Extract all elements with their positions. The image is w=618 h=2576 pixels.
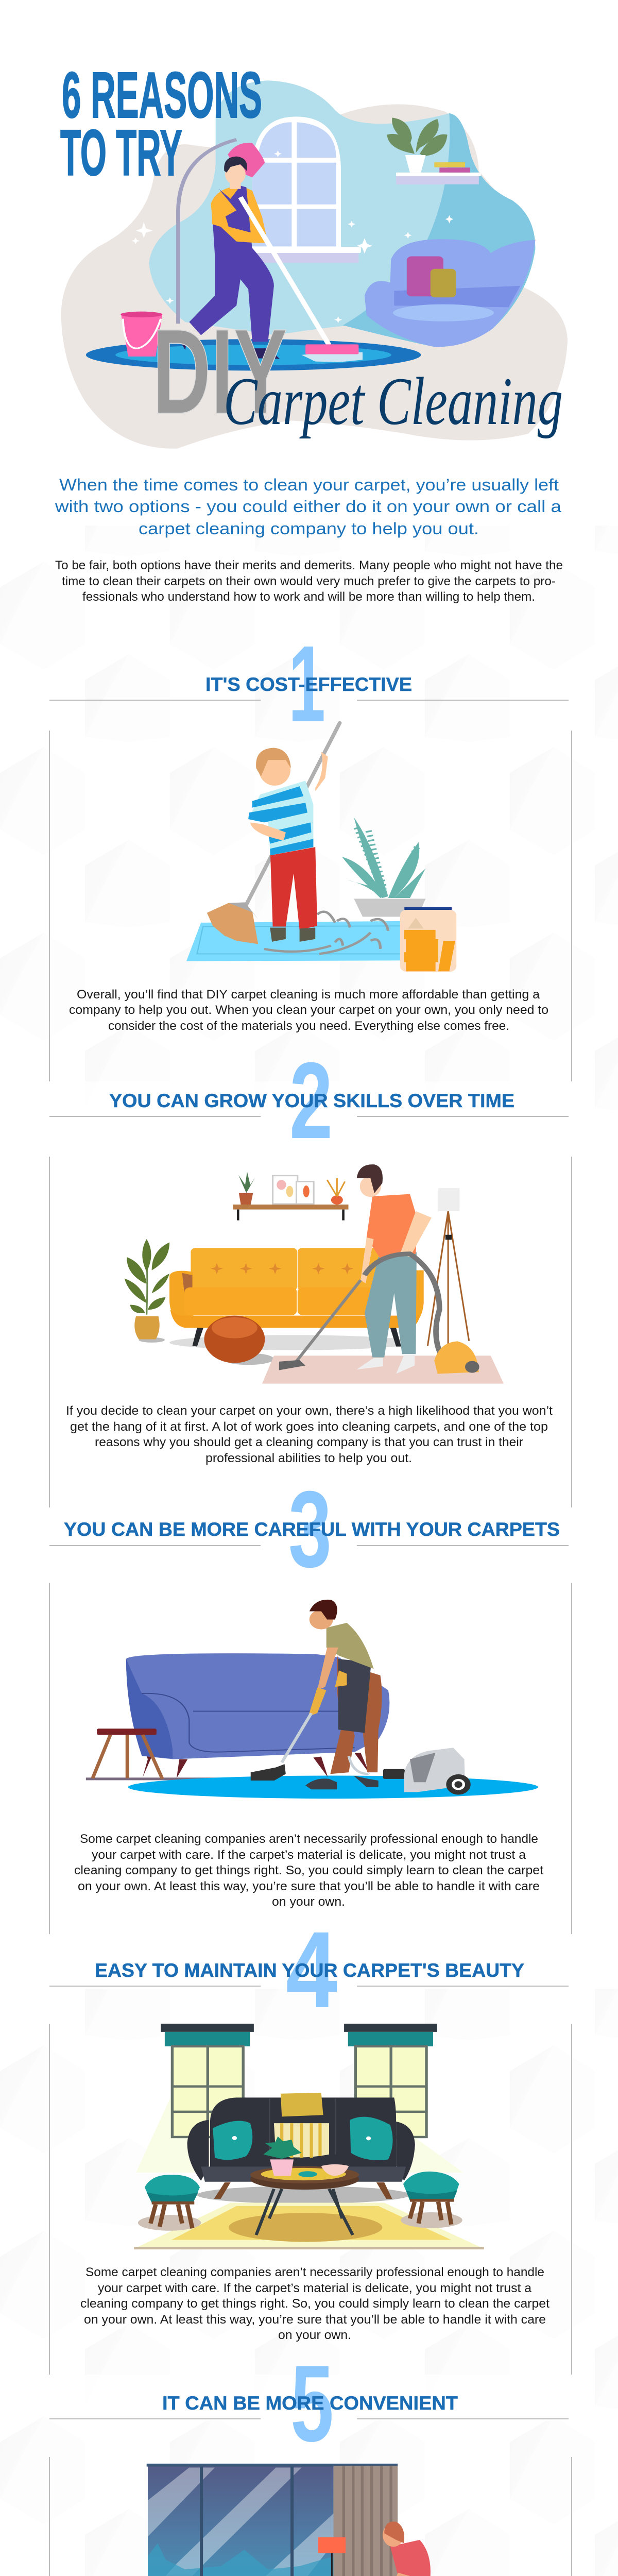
intro text bbox=[55, 476, 561, 538]
text block 1: Overall, you’ll find that DIY carpet cleaning is much more affordable than getting a bbox=[77, 988, 540, 1002]
text block 2: get the hang of it at first. A lot of work goes into cleaning carpets, and one of the top bbox=[70, 1420, 548, 1434]
text block 2 bbox=[66, 1404, 553, 1465]
intro text: carpet cleaning company to help you out. bbox=[139, 519, 479, 538]
illustration: woman vacuuming blue sofa bbox=[86, 1600, 538, 1799]
section 4 heading: 4 bbox=[286, 1909, 337, 2030]
panel 3 frame bbox=[49, 1583, 572, 1934]
illustration: boy sweeping bbox=[186, 723, 456, 972]
text block 3: Some carpet cleaning companies aren’t necessarily professional enough to handle bbox=[80, 1832, 538, 1846]
intro paragraph: fessionals who understand how to work and will be more than willing to help them. bbox=[82, 590, 535, 604]
text block 3: on your own. At least this way, you’re sure that you’ll be able to handle it with care bbox=[78, 1879, 540, 1893]
text block 3 bbox=[74, 1832, 543, 1909]
section 3 heading: YOU CAN BE MORE CAREFUL WITH YOUR CARPETS bbox=[64, 1519, 560, 1540]
illustration: woman vacuuming red rug bbox=[117, 2464, 500, 2576]
title: 6 reasons to try: 6 REASONS bbox=[62, 59, 262, 131]
panel 1 frame bbox=[49, 731, 572, 1081]
section 2 heading: 2 bbox=[289, 1040, 333, 1161]
panel 5 frame bbox=[49, 2457, 572, 2576]
text block 4: on your own. bbox=[278, 2328, 351, 2342]
intro paragraph: To be fair, both options have their merits and demerits. Many people who might not have the bbox=[55, 558, 563, 572]
section 5 heading: IT CAN BE MORE CONVENIENT bbox=[162, 2393, 458, 2414]
section 3 heading: 3 bbox=[288, 1468, 332, 1590]
text block 3: on your own. bbox=[272, 1895, 345, 1909]
section 4 heading bbox=[49, 1909, 572, 2030]
illustration: man vacuuming beside orange sofa bbox=[125, 1164, 504, 1384]
illustration: living room with dark sofa bbox=[134, 2024, 484, 2249]
text block 3: cleaning company to get things right. So, you could simply learn to clean the carpet bbox=[74, 1863, 543, 1877]
panel 2 frame bbox=[49, 1157, 572, 1507]
section 2 heading: YOU CAN GROW YOUR SKILLS OVER TIME bbox=[109, 1090, 514, 1111]
intro text: with two options - you could either do it on your own or call a bbox=[55, 497, 561, 516]
intro paragraph: time to clean their carpets on their own would very much prefer to give the carpets to pro- bbox=[62, 574, 556, 588]
section 1 heading: 1 bbox=[288, 623, 325, 744]
title: DIY: DIY bbox=[152, 303, 287, 439]
text block 4 bbox=[80, 2265, 550, 2342]
text block 1: company to help you out. When you clean your carpet on your own, you only need to bbox=[69, 1003, 548, 1017]
section 4 heading: EASY TO MAINTAIN YOUR CARPET'S BEAUTY bbox=[95, 1960, 524, 1981]
intro paragraph bbox=[55, 558, 563, 604]
text block 4: cleaning company to get things right. So, you could simply learn to clean the carpet bbox=[80, 2297, 550, 2311]
title: 6 reasons to try bbox=[60, 59, 262, 189]
section 1 heading: IT'S COST-EFFECTIVE bbox=[205, 674, 412, 695]
text block 1 bbox=[69, 988, 548, 1033]
intro text: When the time comes to clean your carpet, you’re usually left bbox=[59, 476, 559, 494]
text block 2: reasons why you should get a cleaning company is that you can trust in their bbox=[95, 1435, 523, 1449]
section 2 heading bbox=[49, 1040, 572, 1161]
text block 1: consider the cost of the materials you need. Everything else comes free. bbox=[108, 1019, 509, 1033]
title: 6 reasons to try: TO TRY bbox=[60, 116, 182, 189]
section 5 heading: 5 bbox=[290, 2343, 334, 2464]
panel 4 frame bbox=[49, 2024, 572, 2375]
text block 4: your carpet with care. If the carpet’s material is delicate, you might not trust a bbox=[98, 2281, 531, 2295]
text block 2: If you decide to clean your carpet on your own, there’s a high likelihood that you won’t bbox=[66, 1404, 553, 1418]
text block 4: Some carpet cleaning companies aren’t necessarily professional enough to handle bbox=[85, 2265, 544, 2279]
section 3 heading bbox=[49, 1468, 569, 1590]
text block 4: on your own. At least this way, you’re sure that you’ll be able to handle it with care bbox=[84, 2313, 546, 2327]
hero illustration: cleaner mopping a room bbox=[61, 80, 568, 449]
text block 3: your carpet with care. If the carpet’s material is delicate, you might not trust a bbox=[92, 1848, 526, 1862]
text block 2: professional abilities to help you out. bbox=[205, 1451, 412, 1465]
section 5 heading bbox=[49, 2343, 572, 2464]
section 1 heading bbox=[49, 623, 569, 744]
